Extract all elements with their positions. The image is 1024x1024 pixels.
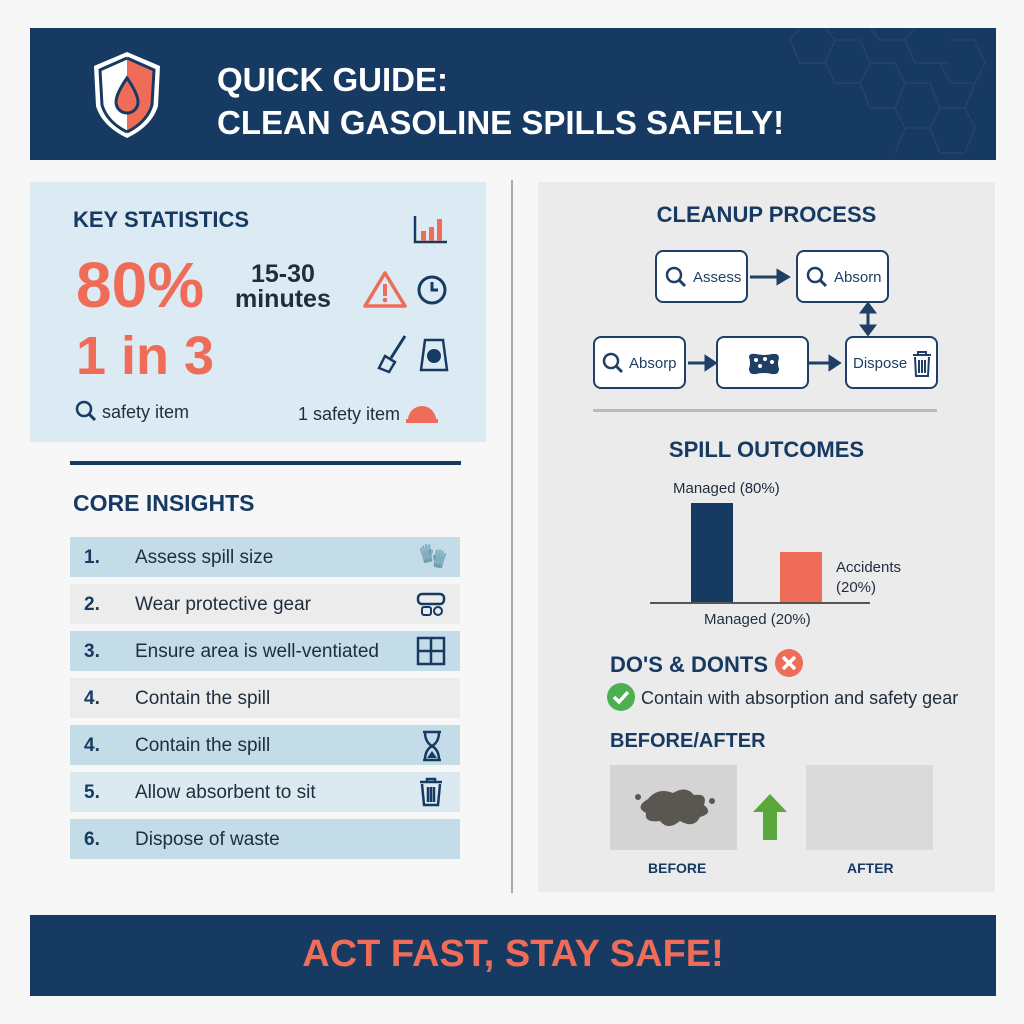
icon: shield with drop [94,52,160,138]
heading: do's and donts: DO'S & DONTS [610,652,768,677]
text: safety item left: safety item [102,402,189,422]
bar chart: Accidents [836,559,901,576]
row 5: 4. [84,735,100,756]
bar chart: Managed (20%) [704,611,811,628]
row 1: Assess spill size [135,547,273,568]
footer banner [30,915,996,996]
icon: shovel and bag [377,335,448,374]
box sponge [716,336,809,389]
heading: key statistics: KEY STATISTICS [73,207,249,232]
stat 1 in 3: 1 in 3 [76,326,214,386]
title: CLEAN GASOLINE SPILLS SAFELY! [217,104,784,141]
label before: BEFORE [648,860,706,876]
box absorn: Absorn [834,269,882,286]
heading: spill outcomes: SPILL OUTCOMES [669,437,864,462]
panel: key statistics [30,182,486,442]
heading: before/after: BEFORE/AFTER [610,730,766,752]
row 1: 🧤 [418,543,448,570]
title [217,61,784,141]
row 4: 4. [84,688,100,709]
row 5 [70,725,460,765]
row 6: Allow absorbent to sit [135,782,316,803]
stat 15-30 minutes: minutes [235,285,331,313]
row 4 [70,678,460,718]
row 7 [70,819,460,859]
footer text: ACT FAST, STAY SAFE! [302,933,724,975]
check item [607,683,958,711]
row 7: 6. [84,829,100,850]
box absorp: Absorp [629,355,677,372]
row 2 [70,584,460,624]
check item: Contain with absorption and safety gear [641,688,958,708]
label after: AFTER [847,860,894,876]
box assess: Assess [693,269,741,286]
header banner [30,28,996,160]
bar chart: (20%) [836,579,876,596]
arrow: green up [753,794,787,840]
row 1 [70,537,460,577]
row 7: Dispose of waste [135,829,280,850]
row 1: 1. [84,547,100,568]
row 6 [70,772,460,812]
heading: core insights: CORE INSIGHTS [73,490,254,516]
flow diagram [593,250,938,389]
icon: bar chart [414,216,447,244]
row 4: Contain the spill [135,688,270,709]
icon: clock [418,276,446,304]
panel: right [538,182,995,892]
box dispose [845,336,938,389]
bar chart: Managed (80%) [673,480,780,497]
box dispose: Dispose [853,355,907,372]
row 2: Wear protective gear [135,594,311,615]
arrows [688,268,877,372]
list: core insights [70,537,460,859]
text: safety item right: 1 safety item [298,404,400,424]
row 3: 3. [84,641,100,662]
before image [610,765,737,850]
row 6: 5. [84,782,100,803]
icon: warning [363,271,407,308]
after image [806,765,933,850]
heading: cleanup process: CLEANUP PROCESS [657,202,876,227]
stat 80%: 80% [76,249,204,321]
box absorn [796,250,889,303]
row 2: 2. [84,594,100,615]
row 3 [70,631,460,671]
bar chart [650,480,901,628]
box assess [655,250,748,303]
row 5: Contain the spill [135,735,270,756]
stat 15-30 minutes: 15-30 [251,260,315,288]
box absorp [593,336,686,389]
stat 15-30 minutes [235,260,331,313]
row 3: Ensure area is well-ventiated [135,641,379,662]
title: QUICK GUIDE: [217,61,448,98]
